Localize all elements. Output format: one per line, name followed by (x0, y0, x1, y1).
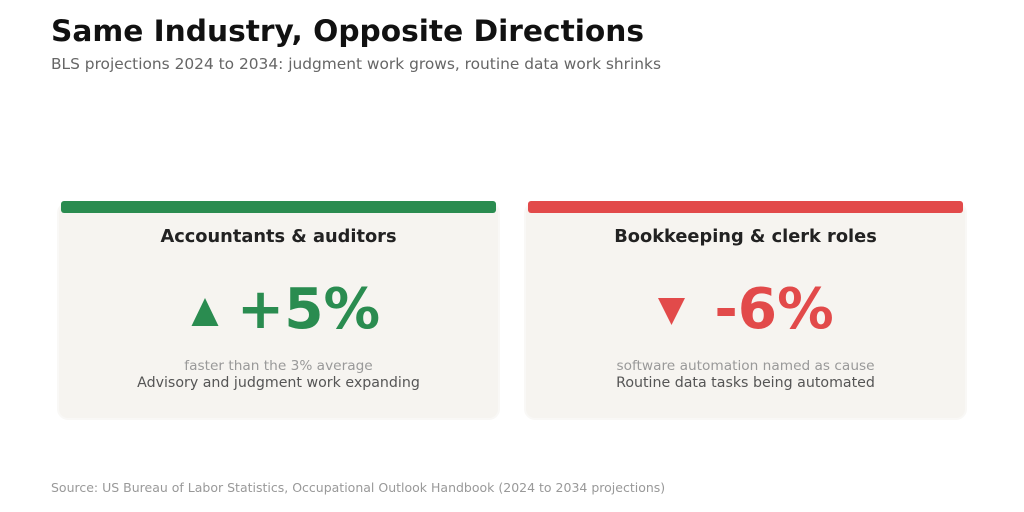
description: Advisory and judgment work expanding (137, 375, 420, 391)
panel: bookkeeping and clerk roles (525, 201, 966, 419)
big stat: minus six percent: -6% (714, 277, 834, 342)
card heading: Bookkeeping & clerk roles (614, 226, 877, 247)
note: software automation named as cause (616, 358, 875, 374)
source: Source: US Bureau of Labor Statistics, Occupational Outlook Handbook (2024 to 2034 projections) (51, 480, 665, 495)
description: Routine data tasks being automated (616, 375, 875, 391)
red top bar (528, 201, 963, 213)
panel: accountants and auditors (58, 201, 499, 419)
green top bar (61, 201, 496, 213)
card heading: Accountants & auditors (160, 226, 397, 247)
title: Same Industry, Opposite Directions (51, 13, 644, 48)
note: faster than the 3% average (184, 358, 373, 374)
icon: down triangle (658, 298, 685, 325)
subtitle: BLS projections 2024 to 2034: judgment work grows, routine data work shrinks (51, 55, 661, 73)
big stat: plus five percent: +5% (237, 277, 380, 342)
icon: up triangle (192, 298, 218, 326)
